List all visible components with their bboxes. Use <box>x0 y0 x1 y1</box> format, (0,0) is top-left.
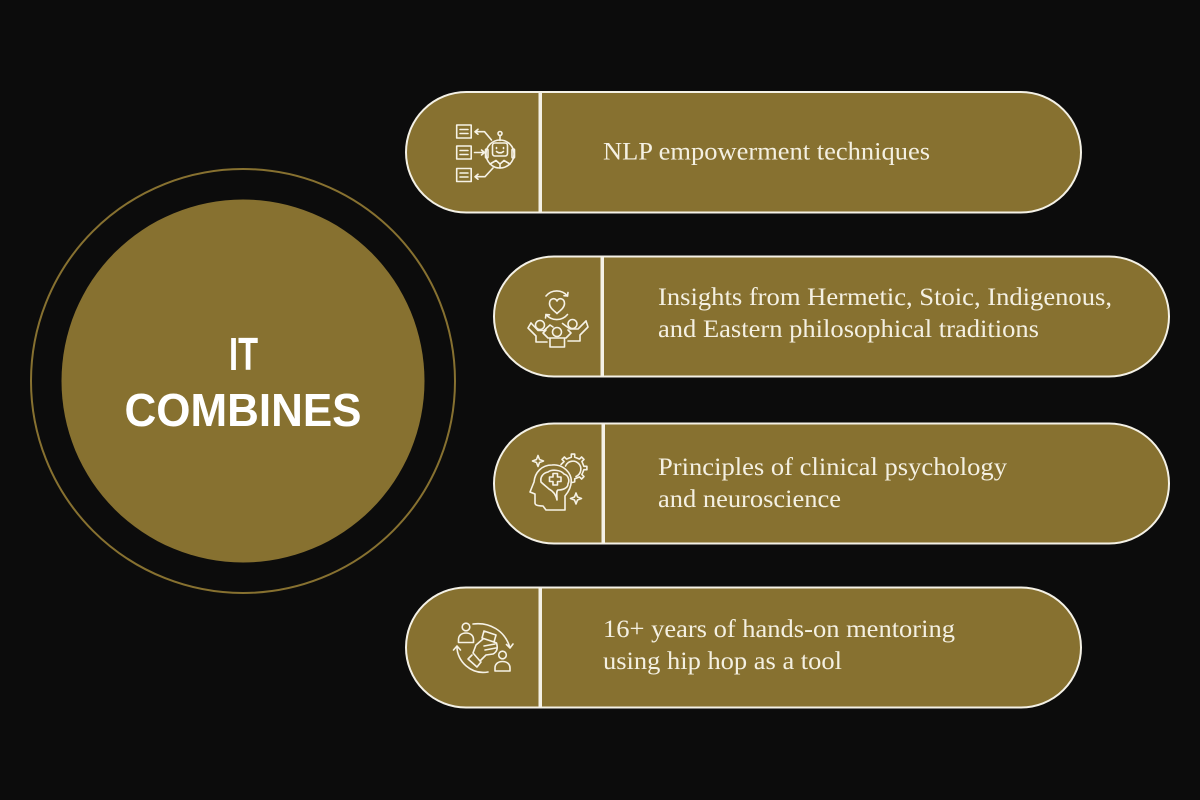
panel: philosophical traditions <box>494 256 1169 376</box>
text: and neuroscience <box>658 486 841 513</box>
heading: IT <box>229 328 258 380</box>
text <box>658 454 1008 513</box>
text: 16+ years of hands-on mentoring <box>603 616 956 643</box>
text: Insights from Hermetic, Stoic, Indigenous, <box>658 284 1112 311</box>
icon: mentoring handshake <box>454 623 513 672</box>
text: NLP empowerment techniques <box>603 138 930 166</box>
text: and Eastern philosophical traditions <box>658 316 1039 343</box>
icon: heart and people <box>528 291 588 347</box>
heading <box>124 328 362 436</box>
central circle: IT COMBINES <box>31 169 455 593</box>
heading: COMBINES <box>124 384 362 436</box>
panel: NLP empowerment techniques <box>406 92 1081 212</box>
text <box>658 284 1112 343</box>
panel: clinical psychology <box>494 424 1169 544</box>
text <box>603 616 956 675</box>
text: Principles of clinical psychology <box>658 454 1008 481</box>
icon: head with gears and plus <box>530 454 587 510</box>
text: using hip hop as a tool <box>603 648 842 675</box>
icon: robot with documents <box>457 125 514 182</box>
panel: years of mentoring <box>406 588 1081 708</box>
